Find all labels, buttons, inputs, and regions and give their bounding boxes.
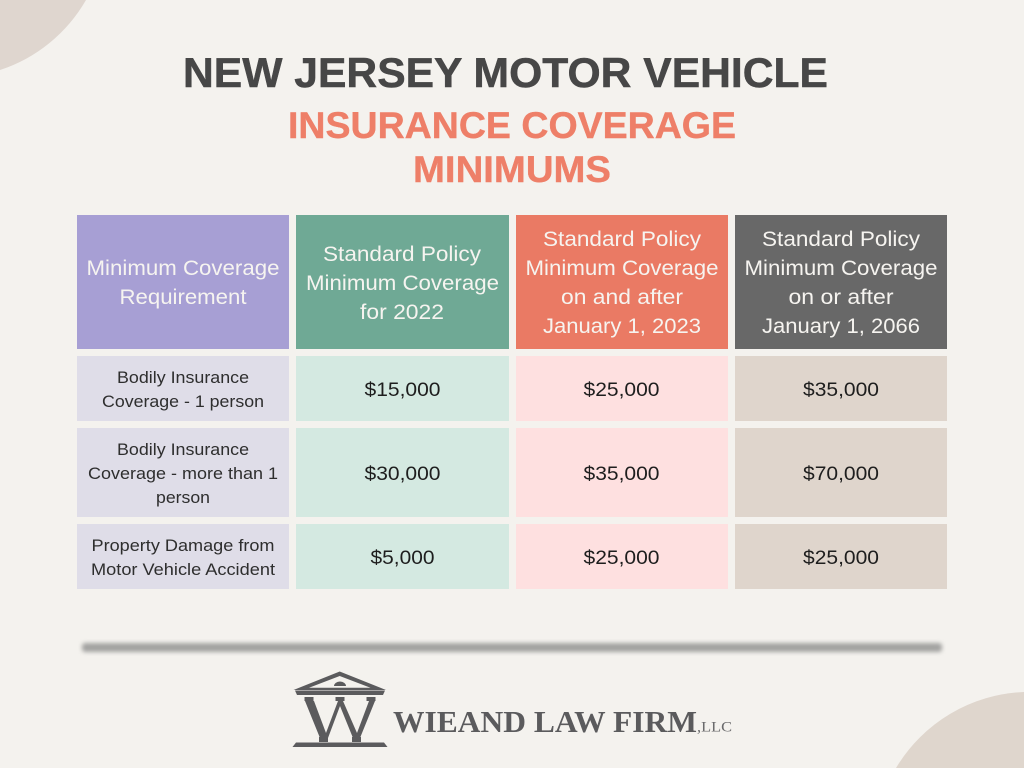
title: INSURANCE COVERAGE (288, 105, 736, 146)
row: bodily insurance 1 person: Bodily Insurance (117, 368, 249, 387)
row: bodily insurance more than 1 person: Bodily Insurance (117, 440, 249, 459)
header: minimum coverage requirement (77, 215, 289, 349)
row: bodily insurance 1 person: $35,000 (803, 379, 879, 401)
shadow divider (82, 643, 942, 652)
icon: courthouse W (292, 672, 388, 747)
row: bodily insurance 1 person (77, 356, 947, 421)
row: bodily insurance more than 1 person: $30,000 (364, 463, 441, 485)
title: MINIMUMS (413, 149, 611, 190)
title (183, 49, 828, 190)
header: coverage for 2022: Standard Policy (323, 242, 481, 266)
row: bodily insurance more than 1 person: $35,000 (584, 463, 660, 485)
header: coverage for 2022: Minimum Coverage (306, 271, 499, 295)
row: property damage: $25,000 (584, 547, 660, 569)
row: bodily insurance 1 person: $15,000 (364, 379, 441, 401)
logo: Wieand Law Firm: ,LLC (697, 720, 732, 736)
row: property damage: Motor Vehicle Accident (91, 560, 275, 579)
row: property damage: $25,000 (803, 547, 879, 569)
header: coverage on and after January 1, 2023: January 1, 2023 (543, 314, 701, 338)
header: coverage on and after January 1, 2023: Standard Policy (543, 227, 701, 251)
row: bodily insurance more than 1 person: person (156, 488, 210, 507)
header: coverage on and after January 1, 2023: on and after (561, 285, 683, 309)
header: coverage on or after January 1, 2066: Standard Policy (762, 227, 920, 251)
title: NEW JERSEY MOTOR VEHICLE (183, 49, 828, 96)
header: coverage for 2022 (296, 215, 509, 349)
row: property damage (77, 524, 947, 589)
row: bodily insurance 1 person: $25,000 (584, 379, 660, 401)
decorative corner shape: bottom right (896, 692, 1024, 768)
header: coverage on or after January 1, 2066: on or after (788, 285, 894, 309)
header: coverage on or after January 1, 2066: January 1, 2066 (762, 314, 920, 338)
header: coverage on or after January 1, 2066 (735, 215, 947, 349)
header: coverage for 2022: for 2022 (360, 300, 444, 324)
row: bodily insurance more than 1 person: Coverage - more than 1 (88, 464, 278, 483)
header: coverage on and after January 1, 2023: Minimum Coverage (526, 256, 718, 280)
row: bodily insurance 1 person: Coverage - 1 person (102, 392, 264, 411)
header: minimum coverage requirement: Requirement (120, 285, 247, 309)
row: property damage: Property Damage from (92, 536, 274, 555)
header: minimum coverage requirement: Minimum Coverage (86, 256, 280, 280)
header: coverage on and after January 1, 2023 (516, 215, 728, 349)
decorative corner shape: top left (0, 0, 86, 70)
row: property damage: $5,000 (370, 547, 435, 569)
row: bodily insurance more than 1 person: $70,000 (803, 463, 879, 485)
logo: Wieand Law Firm (292, 672, 732, 747)
wordmark: WIEAND LAW FIRM (393, 704, 697, 739)
coverage table (77, 215, 947, 589)
row: bodily insurance more than 1 person (77, 428, 947, 517)
header: coverage on or after January 1, 2066: Minimum Coverage (744, 256, 938, 280)
